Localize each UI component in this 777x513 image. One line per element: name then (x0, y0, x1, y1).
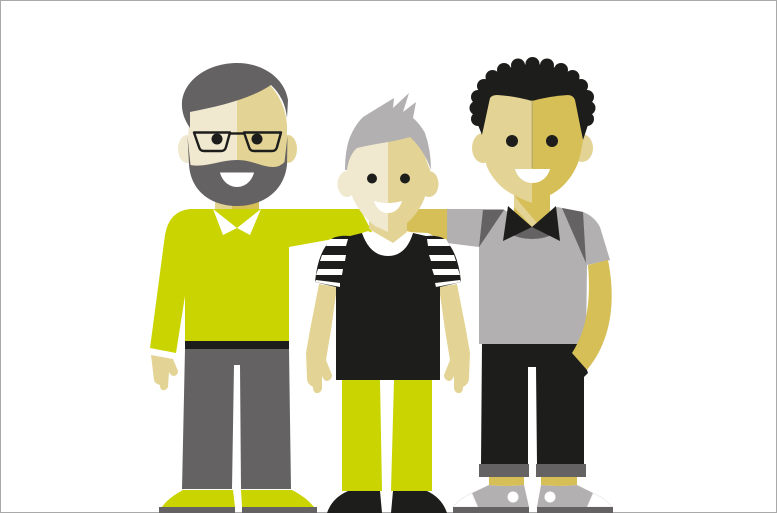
bearded man: white collar (213, 209, 261, 235)
bearded man: hand (151, 355, 178, 390)
curly man: cuffs (479, 464, 586, 477)
curly man: trousers (481, 344, 588, 464)
boy: sleeve stripes left (315, 239, 348, 287)
bearded man: right shoe (241, 490, 314, 507)
figure: boy (306, 93, 470, 513)
boy: sleeve stripes right (427, 239, 461, 287)
boy: legs (342, 380, 432, 491)
curly man: soles (453, 507, 613, 513)
bearded man: glasses (194, 132, 281, 151)
boy: left arm and hand (306, 284, 337, 393)
boy: collar (362, 231, 413, 256)
curly man: ankles (489, 477, 577, 486)
curly man: ears (472, 133, 593, 163)
curly man: curly hair (470, 57, 596, 152)
boy: right arm and hand (439, 284, 470, 393)
figure: curly man's arm behind the boy (407, 209, 447, 243)
curly man: shirt straps (479, 208, 586, 263)
figure: man with curly hair (447, 57, 613, 513)
bearded man: green sweater (150, 209, 372, 353)
curly man: shoe toes (453, 493, 612, 507)
bearded man: trousers (182, 349, 291, 489)
bearded man: beard (188, 136, 288, 206)
boy: spiky hair (345, 93, 431, 170)
curly man: shoe eyelets (508, 492, 556, 502)
boy: neck (369, 215, 407, 243)
boy: ears (338, 171, 438, 197)
curly man: neck (514, 190, 550, 227)
boy: shoes (327, 491, 447, 513)
bearded man: soles (159, 507, 317, 513)
curly man: eyes (506, 135, 558, 147)
boy: black t-shirt (315, 233, 461, 380)
bearded man: left shoe (162, 490, 235, 507)
curly man: collar shadow (508, 227, 556, 239)
bearded man: neck (215, 200, 259, 230)
curly man: grey shirt (447, 207, 610, 344)
curly man: face (482, 95, 583, 203)
bearded man: face (188, 83, 287, 190)
bearded man: ears (178, 135, 297, 163)
boy: face (347, 130, 430, 232)
bearded man: mouth (220, 172, 254, 187)
bearded man: eyes (212, 134, 262, 144)
curly man: arm (572, 260, 612, 370)
curly man: shoes (472, 485, 593, 507)
bearded man: hair (182, 63, 288, 128)
figure: bearded man (150, 63, 372, 513)
curly man: mouth (515, 169, 550, 183)
boy: mouth (374, 201, 402, 213)
bearded man: belt (185, 341, 289, 349)
curly man: bow tie (503, 206, 560, 241)
boy: eyes (367, 174, 410, 184)
